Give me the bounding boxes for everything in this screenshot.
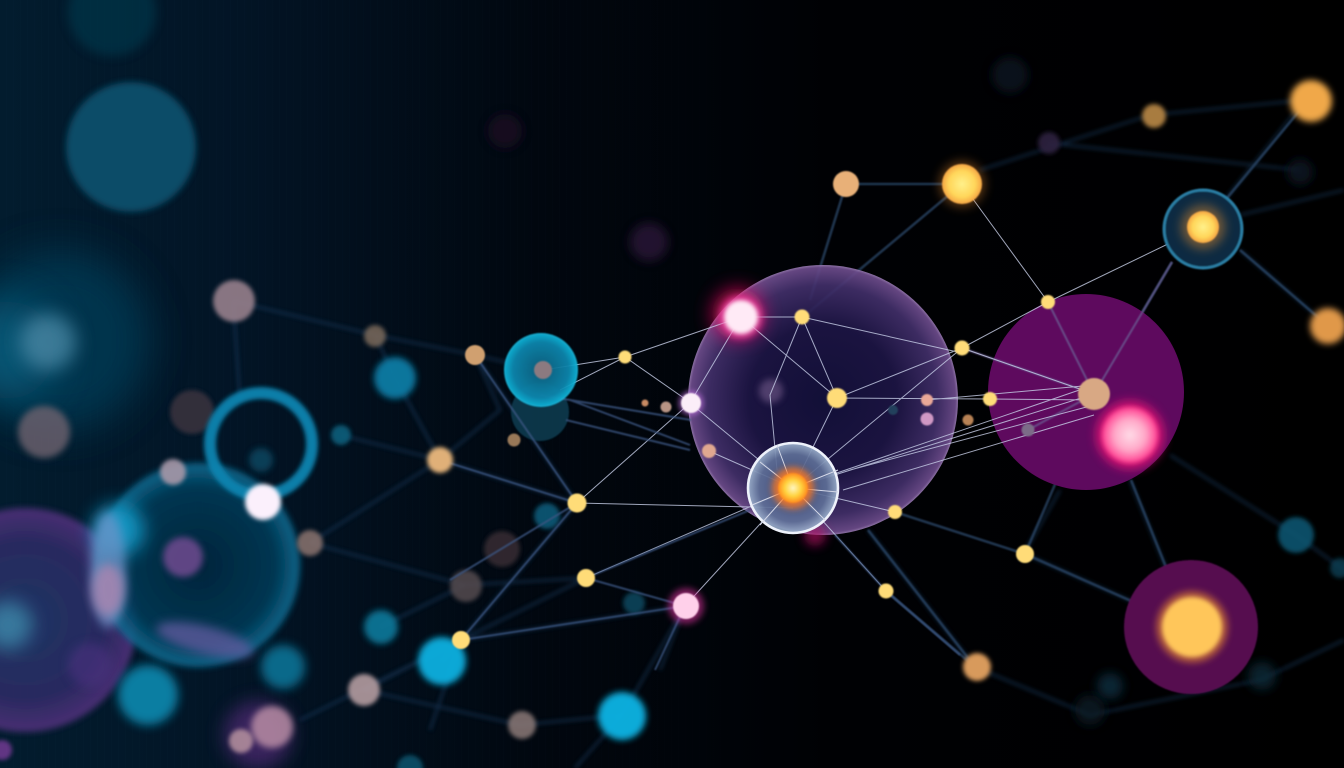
node in magenta disc lower right [1156, 591, 1228, 663]
pink glow beneath ring [804, 524, 826, 546]
background [0, 0, 728, 768]
cyan bubble [504, 333, 578, 407]
blue ring node top right [1164, 190, 1242, 268]
mid-depth blurred nodes left [160, 280, 646, 768]
lines over magenta disc [962, 262, 1172, 430]
small cyan sphere behind [511, 383, 569, 441]
magenta disc lower right [1124, 560, 1258, 694]
glass sphere [688, 265, 958, 535]
top pink-white node [719, 295, 763, 339]
magenta disc [988, 294, 1184, 490]
blurred background connection lines [233, 100, 1344, 768]
blue-grey connections [440, 355, 960, 670]
thin bright connections [543, 184, 1203, 606]
pink glow behind top node [712, 288, 764, 340]
central ring node [748, 443, 838, 533]
tiny pale nodes [508, 394, 1034, 458]
faint node in sphere [759, 379, 783, 403]
glowing pink node in magenta disc [1096, 401, 1164, 469]
right-side soft lines [803, 110, 1327, 667]
faint nodes [488, 57, 1344, 725]
small bright yellow nodes [452, 295, 1055, 649]
blurred far-left bokeh cluster [0, 0, 305, 768]
large warm nodes [427, 80, 1344, 681]
white-pink small nodes [668, 390, 704, 624]
